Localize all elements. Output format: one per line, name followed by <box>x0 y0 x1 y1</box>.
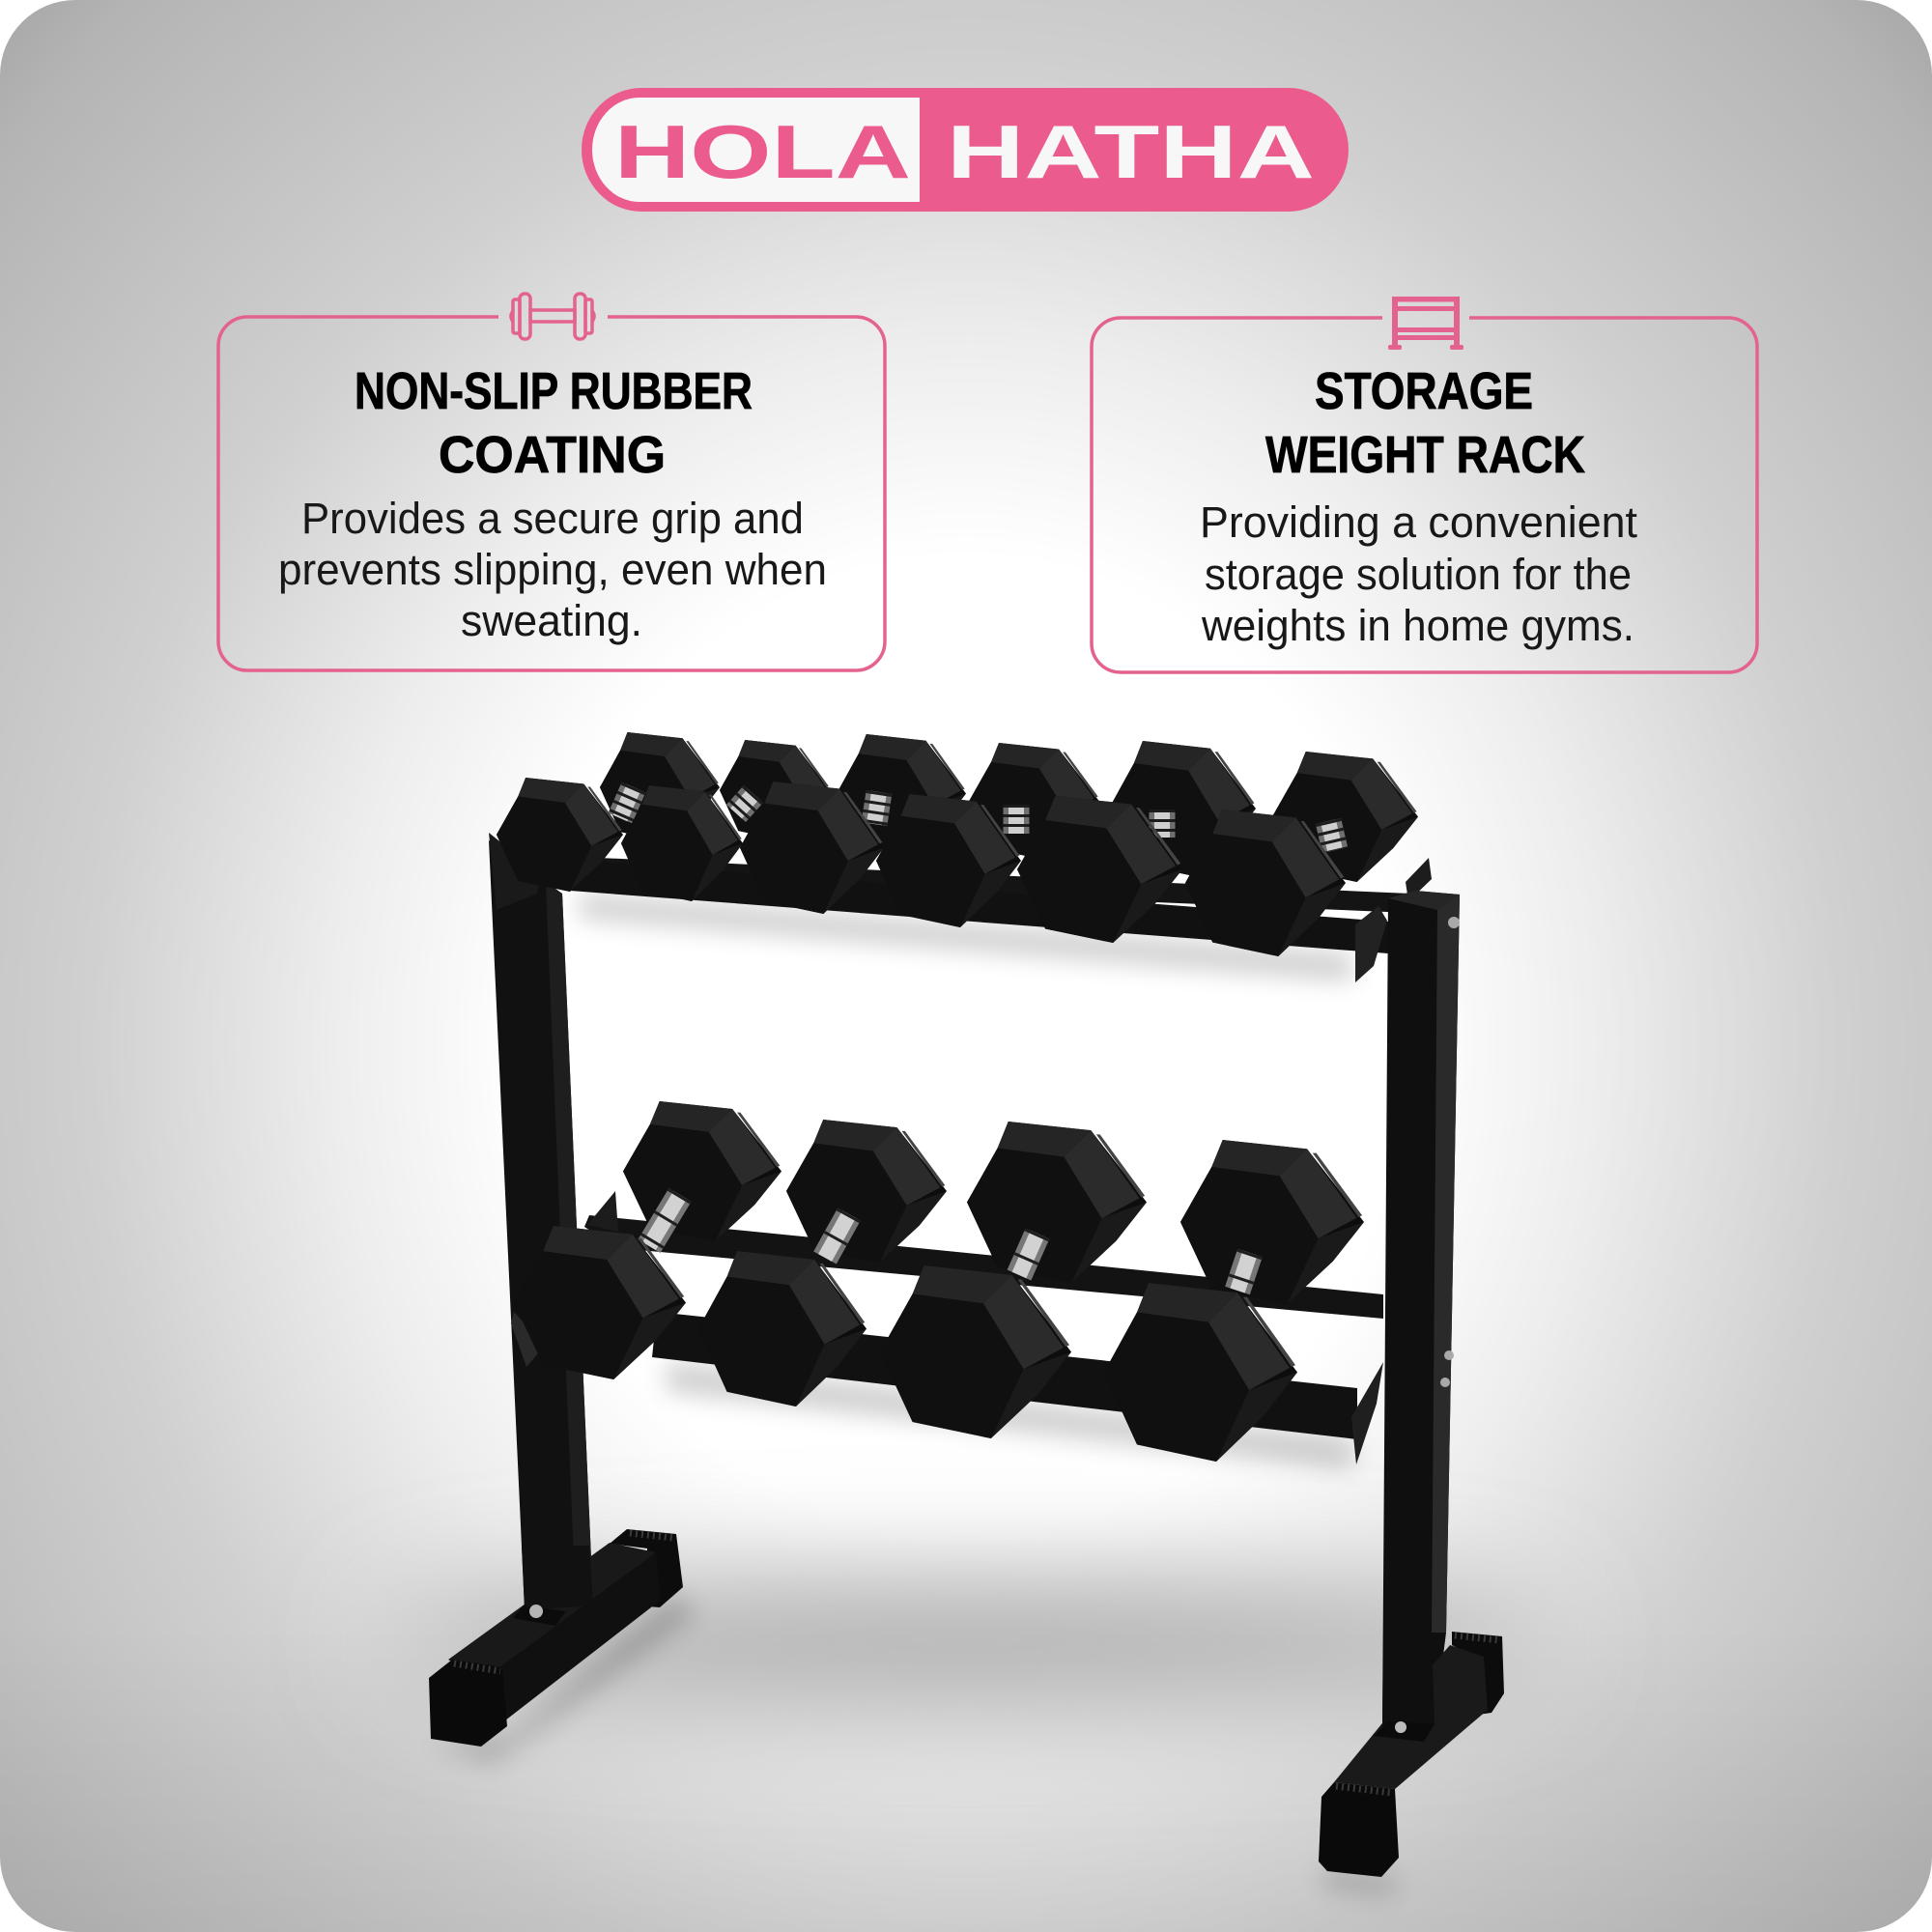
lower front bar <box>652 1312 1357 1439</box>
text block: grip description <box>278 494 827 645</box>
logo: Hola Hatha <box>582 88 1349 212</box>
heading: non-slip rubber coating <box>355 362 753 484</box>
lower dumbbell handles <box>649 1195 1250 1291</box>
lower left bracket <box>511 1312 545 1367</box>
heading: non-slip rubber coating: COATING <box>439 426 666 484</box>
text block: grip description: prevents slipping, even when <box>278 545 827 594</box>
lower rear bar <box>584 1215 1383 1319</box>
right bolt <box>1395 1721 1406 1733</box>
lower back row dumbbell heads <box>623 1101 1364 1304</box>
right upright post <box>1382 891 1460 1724</box>
right front rubber cap <box>1319 1782 1399 1877</box>
left foot bar side face <box>488 1552 660 1734</box>
left foot bar top face <box>448 1543 656 1681</box>
panel: storage weight rack <box>1092 297 1757 672</box>
text block: storage description: storage solution for the <box>1205 550 1632 599</box>
left upright post <box>489 840 593 1608</box>
left foot <box>429 1529 683 1747</box>
text block: grip description: sweating. <box>461 596 642 645</box>
left post in front of foot <box>522 1546 593 1610</box>
upper dumbbell handles <box>620 787 1335 850</box>
icon: dumbbell <box>511 294 594 339</box>
left front rubber cap <box>429 1660 507 1747</box>
panel: non-slip rubber coating <box>218 294 885 670</box>
text block: storage description: Providing a convenient <box>1200 497 1637 547</box>
heading: storage weight rack: WEIGHT RACK <box>1265 426 1585 484</box>
text block: storage description <box>1200 497 1637 650</box>
icon: rack <box>1388 297 1463 350</box>
left bolt <box>529 1605 543 1618</box>
upper front bar <box>570 860 1388 953</box>
floor shadow band <box>386 1584 1546 1700</box>
card outline right <box>1092 318 1757 672</box>
upper right bracket <box>1355 906 1387 982</box>
upper rear bar <box>599 858 1410 913</box>
rack and dumbbells shadows <box>431 894 1399 1893</box>
right bolt plate <box>1374 1721 1435 1742</box>
logo: Hola Hatha: HATHA <box>947 109 1315 194</box>
lower front row dumbbell heads <box>514 1226 1297 1462</box>
upper rear end bracket <box>1406 858 1432 901</box>
left rear rubber cap <box>610 1529 683 1607</box>
lower right bracket <box>1351 1362 1383 1464</box>
right post in front of foot <box>1382 1633 1435 1726</box>
post bolts <box>1440 917 1460 1387</box>
text block: grip description: Provides a secure grip and <box>301 494 804 543</box>
card outline left <box>218 317 885 670</box>
upper left bracket <box>489 833 541 910</box>
right rear rubber cap <box>1452 1632 1504 1715</box>
upper front row dumbbell heads <box>497 778 1346 956</box>
upper back row dumbbell heads <box>600 732 1418 882</box>
heading: non-slip rubber coating: NON-SLIP RUBBER <box>355 362 753 420</box>
right foot <box>1319 1632 1504 1877</box>
left bolt plate <box>513 1605 566 1626</box>
text block: storage description: weights in home gyms. <box>1201 601 1634 650</box>
heading: storage weight rack <box>1265 362 1585 484</box>
heading: storage weight rack: STORAGE <box>1315 362 1533 420</box>
right foot bar <box>1334 1645 1488 1789</box>
weight rack with dumbbells <box>429 732 1504 1877</box>
logo: Hola Hatha: HOLA <box>614 109 911 194</box>
lower rear left bracket <box>587 1191 618 1232</box>
